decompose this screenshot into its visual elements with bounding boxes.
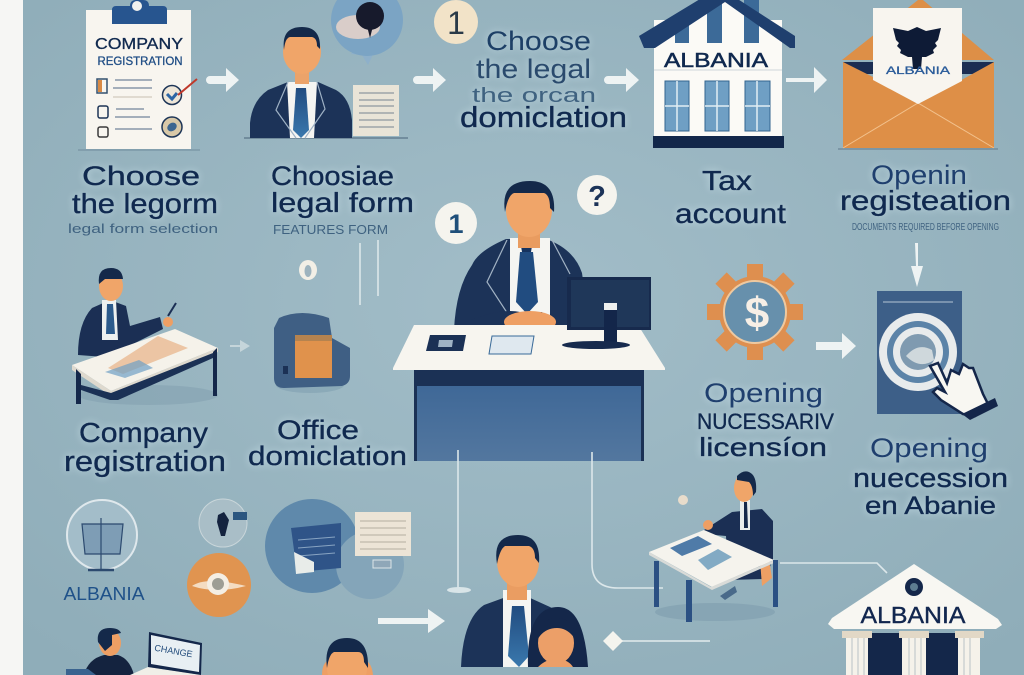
papers on desk (426, 335, 534, 354)
person and colleague bottom center (461, 535, 588, 667)
desk (393, 325, 665, 461)
icon: pointer hand (930, 363, 998, 420)
heading: choose the legal domiclation: domiclation (460, 102, 627, 134)
arrow 6: down (911, 243, 923, 287)
label: opening necession en Abanie (853, 433, 1008, 520)
lamp stand base (447, 587, 471, 593)
label: opening necessary licension: NUCESSARIV (697, 409, 834, 434)
arrow 4 (786, 67, 827, 93)
person at laptop bottom left (66, 628, 202, 675)
label: company registration (64, 417, 226, 478)
heading: choose the legal domiclation: the legal (476, 54, 591, 84)
person at desk: left (72, 268, 218, 405)
label: opening necession en Abanie: nuecession (853, 463, 1008, 493)
icon: gear with dollar (707, 264, 803, 360)
arrow 1 (206, 68, 239, 92)
arrow 5 (816, 333, 856, 359)
label: office domiclation (248, 415, 407, 471)
person at laptop bottom left: CHANGE (154, 643, 193, 659)
heading: choose the legal domiclation: the orcan (472, 85, 596, 107)
step badge: 1 top: 1 (447, 5, 465, 41)
speech bubble: question: ? (588, 181, 606, 213)
icon: printer office domiciliation (274, 313, 350, 393)
label: choose the legorm: Choose (82, 161, 200, 191)
label: opening registration: registeation (840, 185, 1011, 216)
step badge: 1 center (435, 202, 477, 244)
icon: gear with dollar: $ (745, 289, 769, 338)
building: Albania house: ALBANIA (664, 50, 769, 72)
label: opening necessary licension: licensíon (699, 432, 827, 462)
label: office domiclation: Office (277, 415, 359, 445)
label: choose the legorm: legal form selection (68, 221, 218, 236)
monitor (562, 277, 651, 349)
icon: company registration clipboard: COMPANY (95, 36, 183, 53)
building: Albania bank: ALBANIA (860, 602, 966, 628)
icon: company registration clipboard: REGISTRATION (98, 54, 182, 68)
icon: grey circle emblem (199, 499, 247, 547)
heading: choose the legal domiclation (460, 26, 627, 134)
label: opening necession en Abanie: en Abanie (865, 492, 996, 520)
label: choose legal form: FEATURES FORM (273, 222, 388, 237)
icon: envelope with emblem (838, 0, 998, 149)
label: choose the legorm: the legorm (72, 188, 218, 219)
label: choose legal form (271, 161, 414, 237)
arrow: small (230, 340, 250, 352)
building: Albania bank (828, 564, 1002, 675)
arrow 3 (604, 68, 639, 92)
connector node (603, 631, 710, 651)
label: choose legal form: legal form (271, 187, 414, 218)
icon: orange circle (187, 553, 251, 617)
arrow 7 (378, 609, 445, 633)
speech bubble: question (577, 175, 617, 215)
icon: documents in circles (265, 499, 411, 599)
connector lines (360, 240, 887, 588)
heading: choose the legal domiclation: Choose (486, 26, 591, 56)
label: opening registration (840, 160, 1011, 233)
person bottom center left (322, 638, 373, 675)
step badge: 1 center: 1 (448, 209, 464, 239)
building: Albania house (639, 0, 795, 148)
label: tax account (675, 165, 786, 229)
label: company registration: registration (64, 446, 226, 478)
step badge: 1 top (434, 0, 478, 44)
label: opening necession en Abanie: Opening (870, 433, 988, 463)
label: choose the legorm (68, 161, 218, 236)
label: tax account: account (675, 198, 786, 229)
label: tax account: Tax (702, 165, 752, 196)
label: opening registration: Openin (871, 160, 967, 190)
icon: company registration clipboard (78, 0, 200, 150)
label: opening necessary licension (697, 378, 834, 462)
label: Albania small: ALBANIA (64, 584, 144, 604)
panel: target with pointer hand (877, 291, 998, 420)
label: opening necessary licension: Opening (704, 378, 823, 408)
icon: globe ring albania (67, 500, 137, 570)
icon: envelope with emblem: ALBANIA (886, 65, 951, 77)
speech bubble with emblem (331, 0, 403, 65)
arrow 2 (413, 68, 446, 92)
label: choose legal form: Choosiae (271, 161, 394, 191)
icon: droplet badge (299, 260, 317, 280)
label: company registration: Company (79, 417, 208, 448)
central person at desk (393, 181, 665, 461)
person with document (244, 27, 408, 138)
label: office domiclation: domiclation (248, 441, 407, 471)
person at desk: right (649, 471, 778, 622)
